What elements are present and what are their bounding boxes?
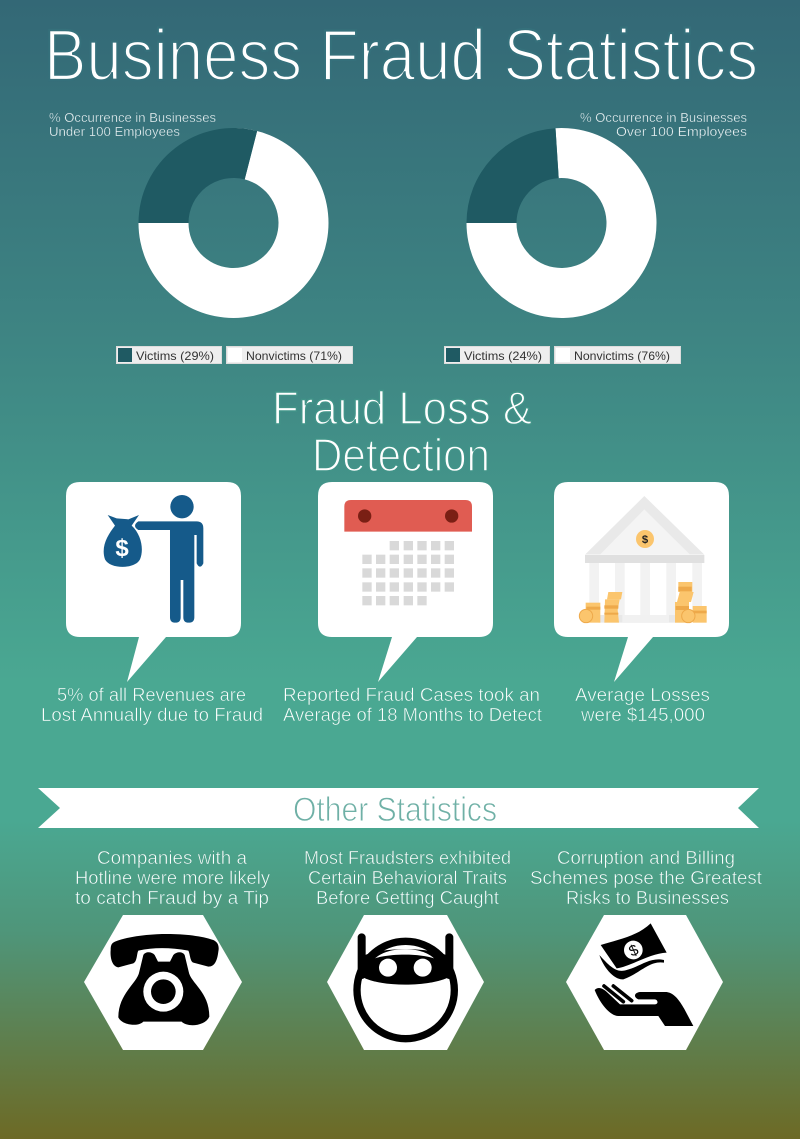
legend: under 100: Nonvictims (71%)	[246, 349, 342, 363]
caption	[575, 684, 710, 725]
legend: under 100: Victims (29%)	[136, 349, 214, 363]
caption: Most Fraudsters exhibited	[304, 847, 511, 868]
chart label: over 100: % Occurrence in Businesses	[580, 111, 747, 125]
legend: over 100: Victims (24%)	[464, 349, 542, 363]
speech bubble	[66, 482, 241, 682]
donut: victims 24 percent	[466, 128, 657, 318]
icon: person holding money bag	[104, 495, 203, 623]
caption: Schemes pose the Greatest	[530, 867, 762, 888]
panel: hotline	[75, 847, 271, 1050]
caption: Reported Fraud Cases took an	[283, 684, 540, 705]
chart label: under 100: Under 100 Employees	[49, 125, 180, 139]
caption: 5% of all Revenues are	[57, 684, 246, 705]
caption: Before Getting Caught	[316, 887, 499, 908]
hexagon	[566, 915, 723, 1050]
panel: behavioral traits	[304, 847, 511, 1050]
speech bubble	[554, 482, 729, 682]
legend: over 100: Nonvictims (76%)	[574, 349, 670, 363]
legend: over 100	[444, 346, 680, 364]
caption: to catch Fraud by a Tip	[75, 887, 269, 908]
panel: average losses	[554, 482, 729, 725]
chart label: under 100	[49, 111, 216, 139]
caption: Lost Annually due to Fraud	[41, 704, 263, 725]
panel: donut chart over 100 employees	[444, 111, 747, 364]
icon: bank with coins: $	[642, 534, 649, 546]
icon: ninja face	[357, 937, 454, 1039]
banner heading: Other Statistics	[293, 791, 497, 829]
hexagon	[84, 915, 242, 1050]
panel: donut chart under 100 employees	[49, 111, 352, 364]
icon: calendar	[344, 500, 472, 605]
caption	[304, 847, 511, 908]
caption	[41, 684, 263, 725]
caption: Companies with a	[97, 847, 248, 868]
panel: revenue lost	[41, 482, 263, 725]
icon: telephone	[111, 934, 219, 1025]
ribbon banner: other statistics	[38, 788, 759, 829]
caption: Risks to Businesses	[566, 887, 729, 908]
heading: fraud loss and detection	[272, 382, 532, 481]
chart label: under 100: % Occurrence in Businesses	[49, 111, 216, 125]
heading: fraud loss and detection: Detection	[312, 429, 490, 481]
caption: Certain Behavioral Traits	[308, 867, 507, 888]
caption	[75, 847, 271, 908]
donut: victims 29 percent	[138, 128, 328, 318]
caption: Average of 18 Months to Detect	[283, 704, 542, 725]
icon: person holding money bag: $	[115, 535, 129, 562]
icon: money over hand	[595, 923, 693, 1026]
heading: fraud loss and detection: Fraud Loss &	[272, 382, 532, 434]
legend: under 100	[116, 346, 352, 364]
speech bubble	[318, 482, 493, 682]
caption	[283, 684, 542, 725]
icon: bank with coins	[579, 496, 707, 623]
chart label: over 100: Over 100 Employees	[616, 125, 747, 139]
hexagon	[327, 915, 484, 1050]
caption: Average Losses	[575, 684, 710, 705]
caption: Hotline were more likely	[75, 867, 271, 888]
icon: money over hand: $	[626, 941, 642, 961]
panel: corruption and billing	[530, 847, 762, 1050]
panel: detection time	[283, 482, 542, 725]
chart label: over 100	[580, 111, 747, 139]
caption: Corruption and Billing	[557, 847, 735, 868]
caption	[530, 847, 762, 908]
caption: were $145,000	[580, 704, 705, 725]
